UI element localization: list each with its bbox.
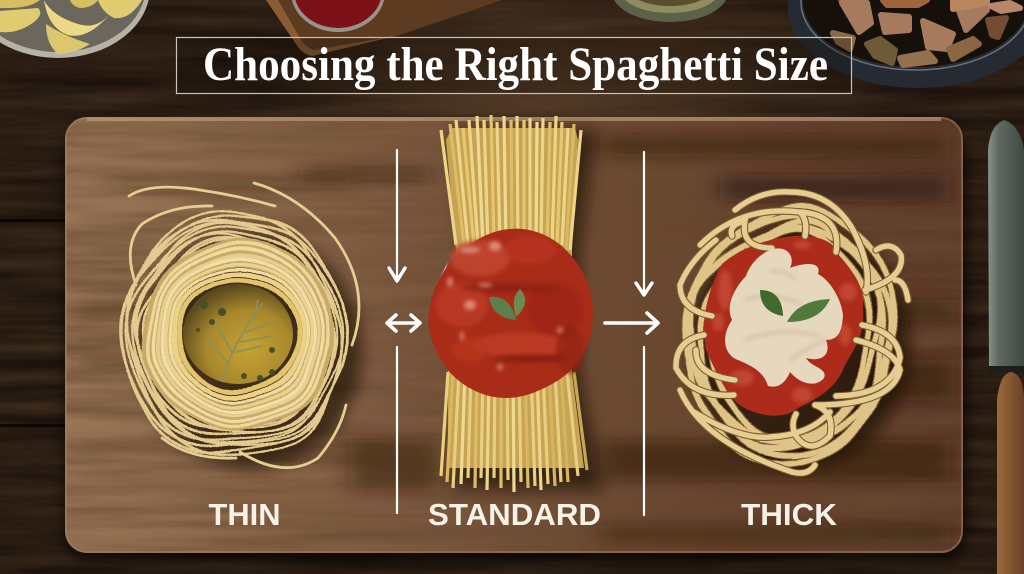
thick spaghetti with sauce and cream — [651, 192, 929, 475]
nest shadow — [138, 232, 362, 468]
right divider arrows — [605, 152, 658, 515]
label: thick: THICK — [741, 498, 837, 532]
thin strands inner ring — [132, 228, 344, 440]
label: thin: THIN — [208, 498, 280, 532]
down arrow — [636, 152, 652, 295]
thin strands outer — [84, 181, 386, 489]
right arrow — [605, 313, 658, 333]
top-layer thick strands: outline — [676, 192, 908, 473]
red sauce — [704, 236, 863, 416]
lower line — [396, 347, 398, 513]
tomato sauce on standard spaghetti — [428, 229, 593, 398]
lower strands — [441, 372, 587, 492]
olive oil centre — [183, 284, 293, 384]
left divider arrows — [387, 150, 420, 513]
bowl of brown pasta — [788, 0, 1024, 88]
cutting board — [65, 117, 966, 562]
top jar of olive oil — [612, 0, 728, 22]
standard spaghetti bundle — [441, 115, 602, 492]
sauce highlights — [447, 241, 563, 370]
down arrow — [389, 150, 405, 281]
upper strands — [441, 115, 581, 250]
bundle shadow — [452, 130, 602, 490]
cream shading — [745, 271, 826, 360]
knife on the right — [988, 120, 1024, 574]
title box — [176, 38, 852, 94]
top wooden tray with red sauce jar — [266, 0, 502, 56]
loose strands — [129, 183, 359, 468]
cream sauce — [725, 248, 843, 387]
thin spaghetti nest — [84, 181, 386, 489]
basil leaves — [760, 290, 830, 322]
label: standard: STANDARD — [428, 498, 601, 532]
under-layer strands — [651, 195, 929, 475]
top-layer thick strands: fill — [676, 192, 908, 473]
sauce highlights — [712, 241, 857, 403]
wood streaks — [75, 135, 955, 543]
double-headed arrow — [387, 315, 420, 331]
top-left plate of pasta — [0, 0, 150, 58]
sauce lumps — [436, 236, 584, 374]
bundle base colour — [446, 128, 584, 468]
lower line — [643, 347, 645, 515]
herb sprig — [208, 300, 274, 381]
herb specks — [196, 301, 275, 381]
plate shadow — [690, 223, 910, 467]
basil leaves — [489, 289, 525, 320]
title text: Choosing the Right Spaghetti Size — [203, 38, 828, 91]
